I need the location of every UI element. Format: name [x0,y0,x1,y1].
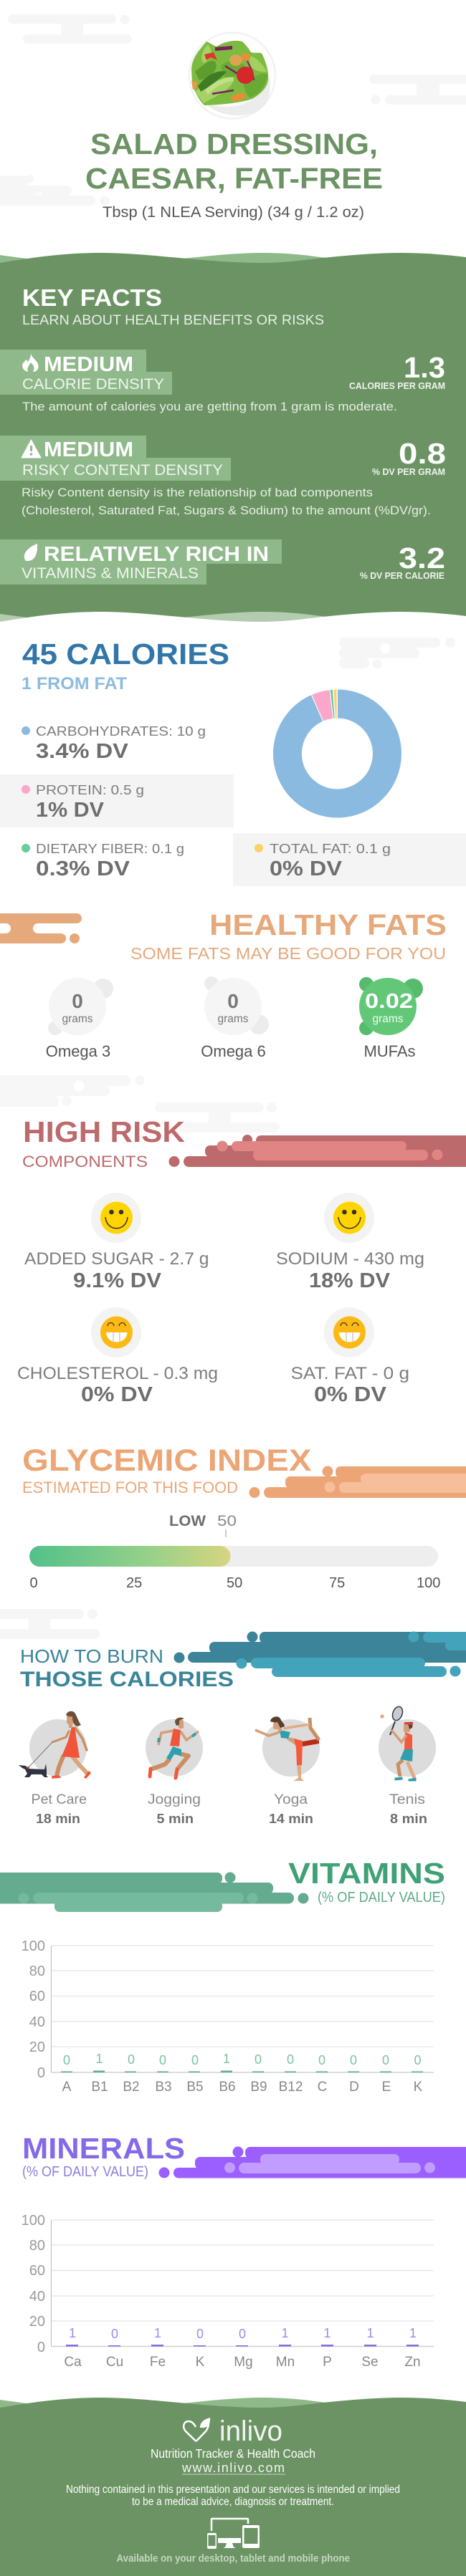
bar chart: vitamins: 1 [95,2052,103,2066]
bar chart: minerals: 60 [29,2263,45,2279]
fact: vitamins and minerals: RELATIVELY RICH IN [44,543,269,566]
fact: risky content density: % DV PER GRAM [372,466,445,477]
heading: glycemic index: ESTIMATED FOR THIS FOOD [22,1479,238,1496]
heading: key facts [22,284,324,328]
gauge: glycemic index: 50 [227,1575,242,1591]
bar chart: minerals: Ca [64,2355,82,2370]
fact: vitamins and minerals: % DV PER CALORIE [360,570,444,581]
background clouds: header [0,14,466,206]
heading: calories [22,638,229,693]
activity: pet care [19,1711,90,1826]
stat: MUFAs: grams [372,1013,404,1025]
bar chart: vitamins: 0 [191,2053,199,2067]
risk: added sugar: ADDED SUGAR - 2.7 g [24,1249,209,1269]
heading: high risk: COMPONENTS [22,1153,148,1171]
section decoration: minerals [159,2146,466,2178]
serving size: Tbsp (1 NLEA Serving) (34 g / 1.2 oz) [103,204,364,221]
fact: calorie density: The amount of calories you are getting from 1 gram is moderate. [22,400,397,413]
footer tagline: Nutrition Tracker & Health Coach [151,2446,315,2461]
legend: dietary fiber [22,842,184,880]
stat: MUFAs: MUFAs [363,1042,416,1060]
footer link: www.inlivo.com [181,2461,285,2475]
fact: risky content density: 0.8 [399,437,446,470]
activity: yoga: 14 min [269,1812,313,1826]
activity: yoga [255,1716,320,1826]
legend: total fat: TOTAL FAT: 0.1 g [270,842,391,856]
bar chart: minerals: Zn [404,2355,421,2370]
activity: pet care: Pet Care [32,1792,87,1807]
heading: high risk: HIGH RISK [23,1115,185,1148]
activity: pet care: 18 min [36,1812,80,1826]
logo: inlivo: inlivo [219,2416,282,2447]
section decoration: high risk [169,1135,466,1167]
risk: cholesterol: CHOLESTEROL - 0.3 mg [17,1364,218,1383]
stat: omega 3: Omega 3 [46,1042,110,1060]
bar chart: vitamins: 0 [350,2053,357,2067]
fact: risky content density: MEDIUM [44,438,133,461]
heading: calories: 45 CALORIES [22,638,229,671]
icon: devices [207,2519,260,2549]
risk: saturated fat [291,1307,409,1406]
bar chart: vitamins [22,1938,434,2095]
heading: burn calories [20,1645,234,1691]
heading: healthy fats [130,908,447,963]
section decoration: glycemic index [249,1466,466,1498]
bar chart: vitamins: 0 [382,2053,389,2067]
legend: protein [0,774,234,827]
gauge: glycemic index: LOW [169,1513,206,1529]
stat: omega 6: grams [217,1013,249,1025]
background cloud: burn [0,1609,100,1639]
stat: omega 3: grams [62,1013,93,1025]
bar chart: minerals: 1 [323,2326,331,2340]
fact: calorie density: MEDIUM [44,353,133,376]
bar chart: minerals: Mg [234,2355,253,2370]
icon: smiling face [91,1193,141,1243]
legend: carbohydrates [22,724,206,763]
bar chart: minerals: 100 [22,2213,45,2229]
fact: risky content density: (Cholesterol, Saturated Fat, Sugars & Sodium) to the amount (%DV/gr). [22,504,431,517]
bar chart: vitamins: 0 [37,2065,45,2081]
bar chart: minerals: 40 [29,2289,45,2305]
section decoration: burn calories [173,1632,466,1677]
bar chart: minerals: K [196,2355,205,2370]
legend: carbohydrates: 3.4% DV [36,740,129,763]
fact: risky content density: RISKY CONTENT DENSITY [22,462,223,479]
heading: key facts: LEARN ABOUT HEALTH BENEFITS OR RISKS [22,312,324,328]
gauge: glycemic index: 0 [30,1575,38,1591]
bar chart: vitamins: 1 [223,2052,230,2066]
stat: omega 3: 0 [72,990,83,1012]
bar chart: vitamins: C [318,2080,327,2095]
title: CAESAR, FAT-FREE [85,162,383,195]
bar chart: vitamins: 100 [22,1938,45,1954]
activity: jogging: Jogging [148,1792,201,1807]
bar chart: vitamins: 40 [29,2014,45,2030]
stat: omega 6: 0 [227,990,239,1012]
heading: burn calories: THOSE CALORIES [20,1668,234,1691]
bar chart: vitamins: 60 [29,1989,45,2004]
icon: salad bowl [189,33,275,119]
bar chart: minerals: P [323,2355,332,2370]
stat: omega 6: Omega 6 [201,1042,266,1060]
icon: leaf [24,544,37,561]
heading: key facts: KEY FACTS [22,284,162,311]
fact: vitamins and minerals [0,539,445,585]
gauge: glycemic index [29,1513,440,1591]
stat: MUFAs: 0.02 [365,990,413,1013]
bar chart: vitamins: E [382,2080,391,2095]
legend: protein: PROTEIN: 0.5 g [36,783,144,797]
activity: jogging [146,1718,203,1826]
heading: minerals [22,2132,185,2180]
fact: risky content density [0,436,446,517]
bar chart: minerals: 1 [409,2326,417,2340]
bar chart: minerals: 0 [111,2327,118,2341]
bar chart: minerals: 80 [29,2238,45,2254]
legend: total fat: 0% DV [270,857,343,880]
stat: omega 6 [201,976,269,1060]
bar chart: minerals: 1 [69,2326,76,2340]
risk: sodium [276,1193,424,1292]
activity: tennis: 8 min [390,1812,427,1826]
bar chart: vitamins: B5 [186,2080,204,2095]
bar chart: minerals: Fe [150,2355,166,2370]
bar chart: vitamins: B3 [155,2080,172,2095]
heading: vitamins: (% OF DAILY VALUE) [318,1890,445,1905]
activity: jogging: 5 min [156,1812,194,1826]
bar chart: minerals: Cu [106,2355,123,2370]
bar chart: vitamins: 0 [63,2053,70,2067]
risk: saturated fat: 0% DV [314,1383,387,1406]
bar chart: vitamins: B2 [123,2080,140,2095]
bar chart: minerals: 0 [239,2327,246,2341]
fact: calorie density: CALORIE DENSITY [22,376,164,393]
activity: tennis [379,1705,436,1826]
icon: runner [150,1718,199,1778]
icon: tennis player [380,1705,416,1781]
bar chart: minerals: 0 [37,2340,45,2355]
background clouds: high risk [0,1075,280,1133]
bar chart: vitamins: 20 [29,2039,45,2055]
section decoration: vitamins [0,1873,308,1912]
heading: high risk [22,1115,185,1171]
fact: calorie density: 1.3 [404,351,445,384]
risk: sodium: SODIUM - 430 mg [276,1249,424,1269]
risk: added sugar [24,1193,209,1292]
legend: carbohydrates: CARBOHYDRATES: 10 g [36,724,206,739]
bar chart: minerals: Mn [276,2355,295,2370]
heading: glycemic index [22,1443,312,1496]
icon: grinning face [91,1307,141,1357]
bar chart: vitamins: B1 [91,2080,108,2095]
bar chart: vitamins: D [349,2080,359,2095]
bar chart: vitamins: 80 [29,1964,45,1979]
title: SALAD DRESSING, [90,128,378,160]
bar chart: vitamins: K [414,2080,423,2095]
risk: sodium: 18% DV [309,1269,391,1292]
gauge: glycemic index: 100 [417,1575,440,1591]
legend: dietary fiber: DIETARY FIBER: 0.1 g [36,842,184,856]
icon: yoga pose [255,1716,319,1781]
background cloud: calories [339,638,455,669]
bar chart: minerals: Se [361,2355,379,2370]
bar chart: minerals [22,2213,434,2370]
risk: saturated fat: SAT. FAT - 0 g [291,1364,409,1383]
activity: yoga: Yoga [274,1792,308,1807]
gauge: glycemic index: 75 [329,1575,345,1591]
stat: omega 3 [46,978,113,1060]
icon: smiling face [324,1193,374,1243]
heading: calories: 1 FROM FAT [22,674,127,693]
bar chart: vitamins: 0 [255,2052,262,2067]
activity: tennis: Tenis [389,1792,425,1807]
donut chart: macronutrients [272,689,401,818]
bar chart: vitamins: A [62,2080,72,2095]
panel: footer [0,2398,466,2576]
heading: minerals: (% OF DAILY VALUE) [22,2164,148,2180]
heading: healthy fats: HEALTHY FATS [209,908,447,941]
bar chart: minerals: 1 [154,2326,161,2340]
title [85,128,383,195]
heading: glycemic index: GLYCEMIC INDEX [22,1443,312,1478]
bar chart: minerals: 0 [196,2327,204,2341]
bar chart: vitamins: 0 [128,2052,135,2067]
bar chart: vitamins: 0 [159,2053,166,2067]
disclaimer: to be a medical advice, diagnosis or treatment. [132,2496,334,2508]
bar chart: vitamins: B12 [279,2080,303,2095]
bar chart: vitamins: 0 [414,2053,422,2067]
bar chart: minerals: 1 [281,2326,289,2340]
risk: cholesterol: 0% DV [81,1383,153,1406]
gauge: glycemic index: 25 [126,1575,142,1591]
legend: dietary fiber: 0.3% DV [36,857,130,880]
fact: calorie density: CALORIES PER GRAM [349,380,445,391]
icon: flame [22,353,39,372]
bar chart: minerals: 20 [29,2314,45,2330]
risk: added sugar: 9.1% DV [73,1269,162,1292]
heading: healthy fats: SOME FATS MAY BE GOOD FOR YOU [130,944,446,963]
fact: risky content density: Risky Content density is the relationship of bad components [22,486,373,499]
legend: protein: 1% DV [36,799,105,822]
logo: inlivo [184,2416,282,2447]
icon: warning triangle [22,440,41,458]
heading: vitamins [288,1857,445,1905]
section decoration: healthy fats [0,913,82,943]
fact: vitamins and minerals: 3.2 [399,542,445,575]
heading: minerals: MINERALS [22,2132,185,2165]
availability note: Available on your desktop, tablet and mobile phone [116,2552,350,2565]
disclaimer: Nothing contained in this presentation and our services is intended or implied [66,2484,400,2496]
fact: vitamins and minerals: VITAMINS & MINERALS [22,565,199,582]
panel: key facts [0,253,466,630]
gauge: glycemic index: 50 [217,1513,237,1529]
stat: MUFAs [359,977,423,1060]
heading: vitamins: VITAMINS [288,1857,445,1890]
bar chart: minerals: 1 [366,2326,374,2340]
icon: grinning face [324,1307,374,1357]
bar chart: vitamins: 0 [287,2052,294,2067]
icon: woman walking dog [19,1711,90,1778]
bar chart: vitamins: B9 [250,2080,267,2095]
risk: cholesterol [17,1307,218,1406]
fact: calorie density [0,350,445,413]
bar chart: vitamins: B6 [219,2080,236,2095]
disclaimer [66,2484,400,2508]
legend: total fat [233,833,466,886]
bar chart: vitamins: 0 [318,2053,325,2067]
heading: burn calories: HOW TO BURN [20,1645,163,1667]
